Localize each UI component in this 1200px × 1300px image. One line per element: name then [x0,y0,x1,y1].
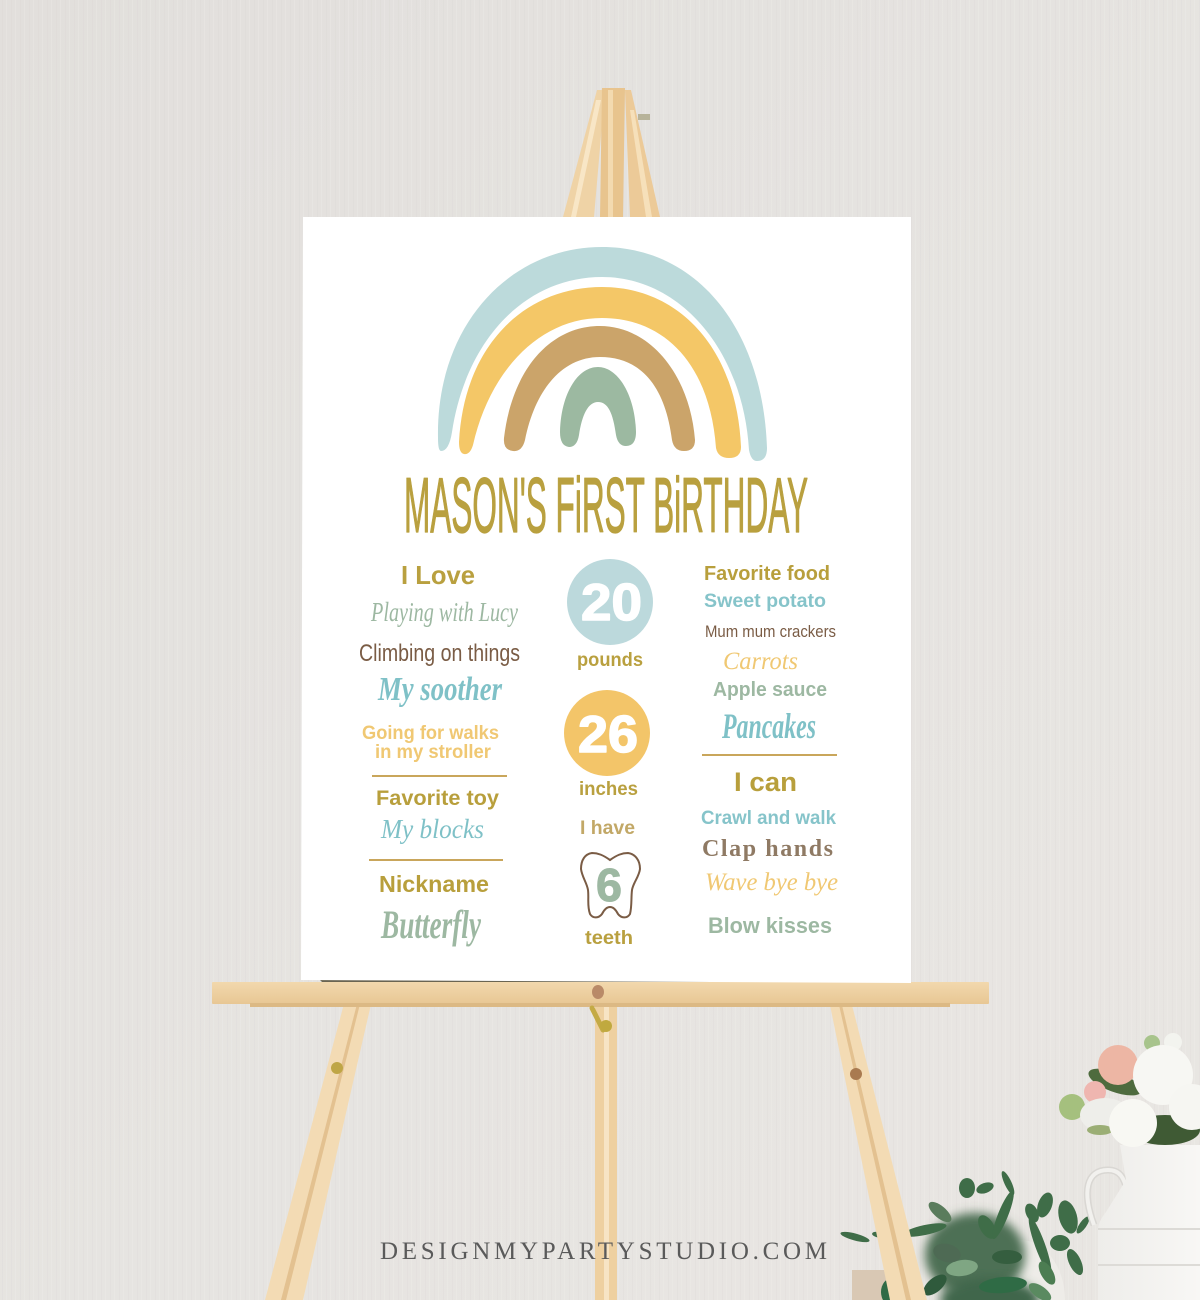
stat: 26 inches [564,690,650,800]
item: My soother: My soother [377,671,503,708]
item: My blocks: My blocks [380,814,484,844]
icon: tooth with 6: 6 [596,859,622,911]
item: Climbing on things: Climbing on things [359,640,520,667]
stat: 20 pounds [567,559,653,671]
watermark: DESIGNMYPARTYSTUDIO.COM [380,1238,827,1265]
item: Going for walks in my stroller [362,723,499,763]
easel shelf [212,980,989,1032]
icon: tooth with 6 [581,853,640,917]
heading: I can: I can [734,767,797,797]
stat: 20 pounds: 20 [581,574,642,632]
icon: green potted plant [840,1170,1092,1300]
right column: favorite food and I can [701,563,838,938]
stat: 26 inches: inches [579,779,638,800]
item: Going for walks in my stroller: Going for walks [362,723,499,744]
rainbow [438,247,767,461]
left column: I love list [359,560,520,947]
heading: Favorite toy: Favorite toy [376,787,499,810]
center column: stats [564,559,653,949]
heading: Favorite food: Favorite food [704,563,830,585]
icon: flower bouquet [1059,1033,1200,1147]
item: Going for walks in my stroller: in my stroller [375,742,492,763]
item: Sweet potato: Sweet potato [704,591,826,612]
label: teeth: teeth [585,928,633,949]
heading: Nickname: Nickname [379,871,489,897]
item: Playing with Lucy: Playing with Lucy [370,597,518,627]
stat: 20 pounds: pounds [577,650,643,671]
item: Crawl and walk: Crawl and walk [701,808,836,829]
item: Apple sauce: Apple sauce [713,679,827,701]
right easel leg [331,1005,927,1300]
label: I have: I have [580,818,635,839]
item: Wave bye bye: Wave bye bye [705,869,838,896]
easel bottom legs [265,1000,617,1300]
item: Mum mum crackers: Mum mum crackers [705,622,836,641]
heading: I Love: I Love [401,560,475,590]
icon: white jug [1087,1145,1200,1300]
item: Butterfly: Butterfly [380,902,481,947]
easel top legs [563,88,660,217]
item: Pancakes: Pancakes [721,706,816,746]
item: Carrots: Carrots [723,648,798,675]
stat: 26 inches: 26 [578,706,638,764]
item: Clap hands: Clap hands [702,836,833,862]
panel: white poster board [301,217,911,983]
item: Blow kisses: Blow kisses [708,913,832,938]
beige box behind plant [852,1270,908,1300]
